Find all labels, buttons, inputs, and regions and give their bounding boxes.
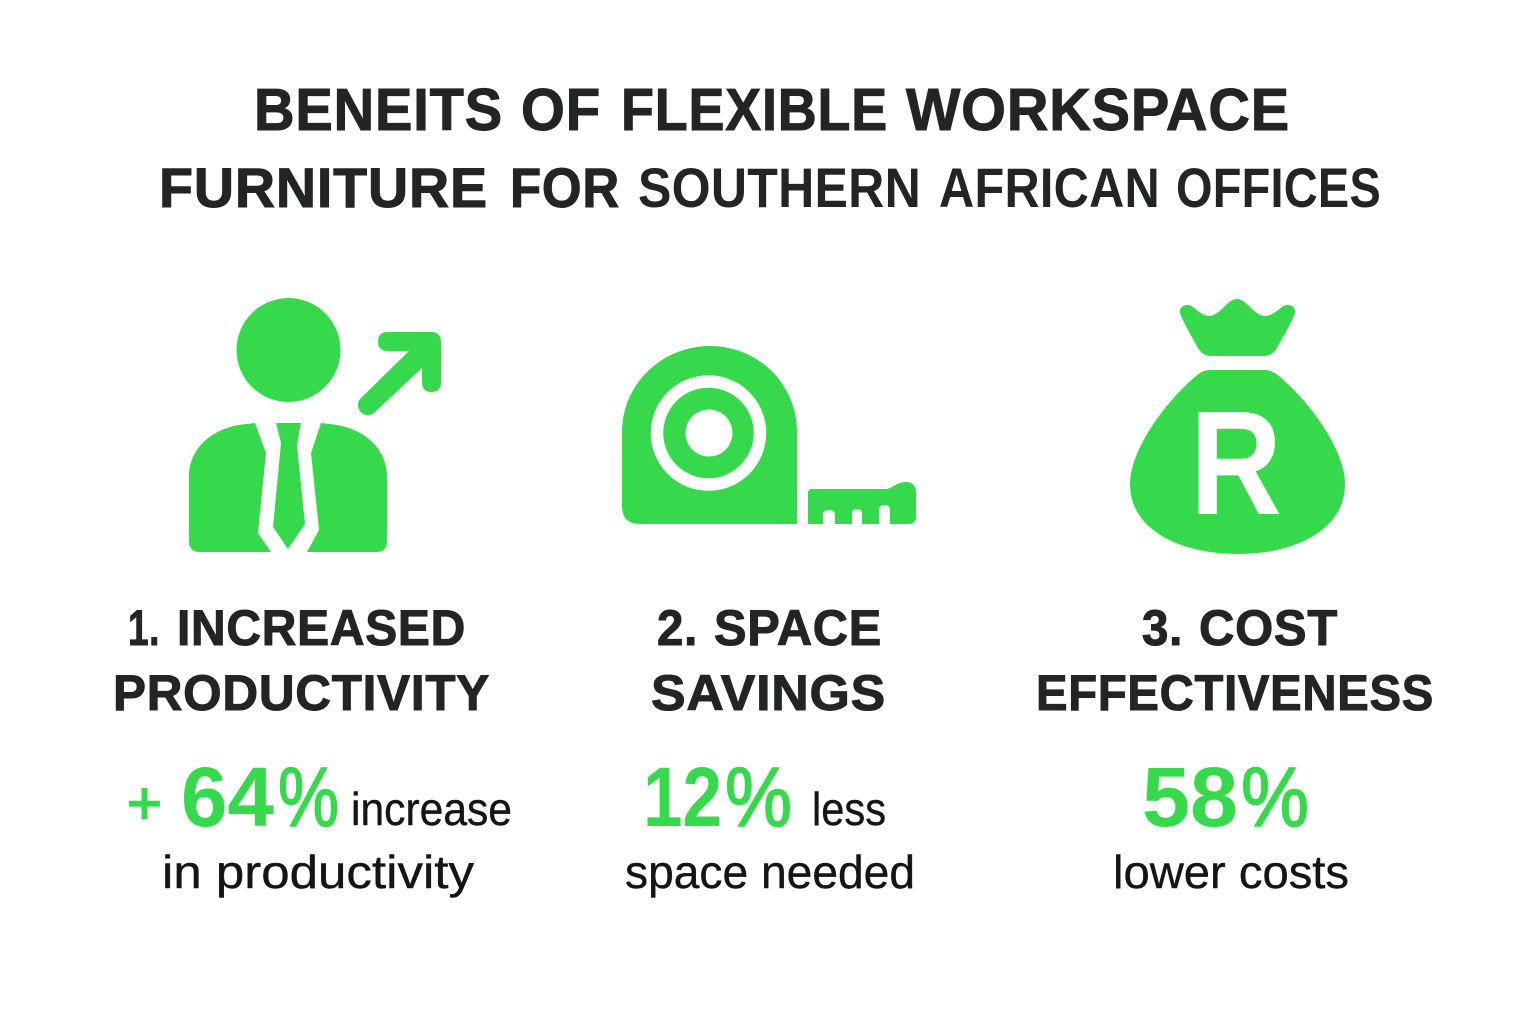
stat: cost: lower costs (1113, 846, 1349, 898)
column 1 heading: INCREASED (177, 600, 466, 656)
column 3 heading: EFFECTIVENESS (1036, 665, 1434, 721)
title: FURNITURE (159, 156, 488, 219)
title: AFRICAN (939, 156, 1160, 219)
title: SOUTHERN (638, 156, 921, 219)
stat: space: less (812, 783, 886, 835)
stat: productivity: in productivity (162, 846, 474, 898)
column 3 heading: 3. (1142, 600, 1183, 656)
title: FLEXIBLE (621, 77, 888, 143)
stat: productivity: % (278, 750, 339, 844)
stat: cost: 58 (1142, 750, 1238, 844)
title: OF (521, 77, 601, 143)
stat: productivity: increase (351, 783, 512, 835)
column 2 heading (651, 600, 886, 721)
title: WORKSPACE (906, 77, 1290, 143)
column 1 heading (113, 600, 490, 721)
column 3 heading (1036, 600, 1434, 721)
title (159, 77, 1381, 219)
stat: cost: % (1241, 750, 1309, 844)
icon: money bag (1130, 299, 1345, 554)
column 1 heading: PRODUCTIVITY (113, 665, 490, 721)
column 2 heading: SAVINGS (651, 665, 886, 721)
title: FOR (510, 156, 620, 219)
column 2 heading: SPACE (714, 600, 882, 656)
column 3 heading: COST (1199, 600, 1338, 656)
icon: tape measure (622, 346, 916, 524)
column 1 heading: 1. (128, 600, 160, 656)
stat: space: space needed (625, 846, 915, 898)
stat: cost (1113, 750, 1349, 898)
column 2 heading: 2. (657, 600, 698, 656)
title: BENEITS (254, 77, 503, 143)
stat: productivity: + (127, 770, 162, 837)
stat: space (625, 750, 915, 898)
stat: space: % (725, 750, 792, 844)
stat: productivity (127, 750, 512, 898)
stat: productivity: 64 (181, 750, 274, 844)
icon: person with up arrow (189, 298, 441, 552)
stat: space: 12 (643, 750, 722, 844)
title: OFFICES (1176, 156, 1381, 219)
icon letter: rand: R (1190, 381, 1282, 546)
